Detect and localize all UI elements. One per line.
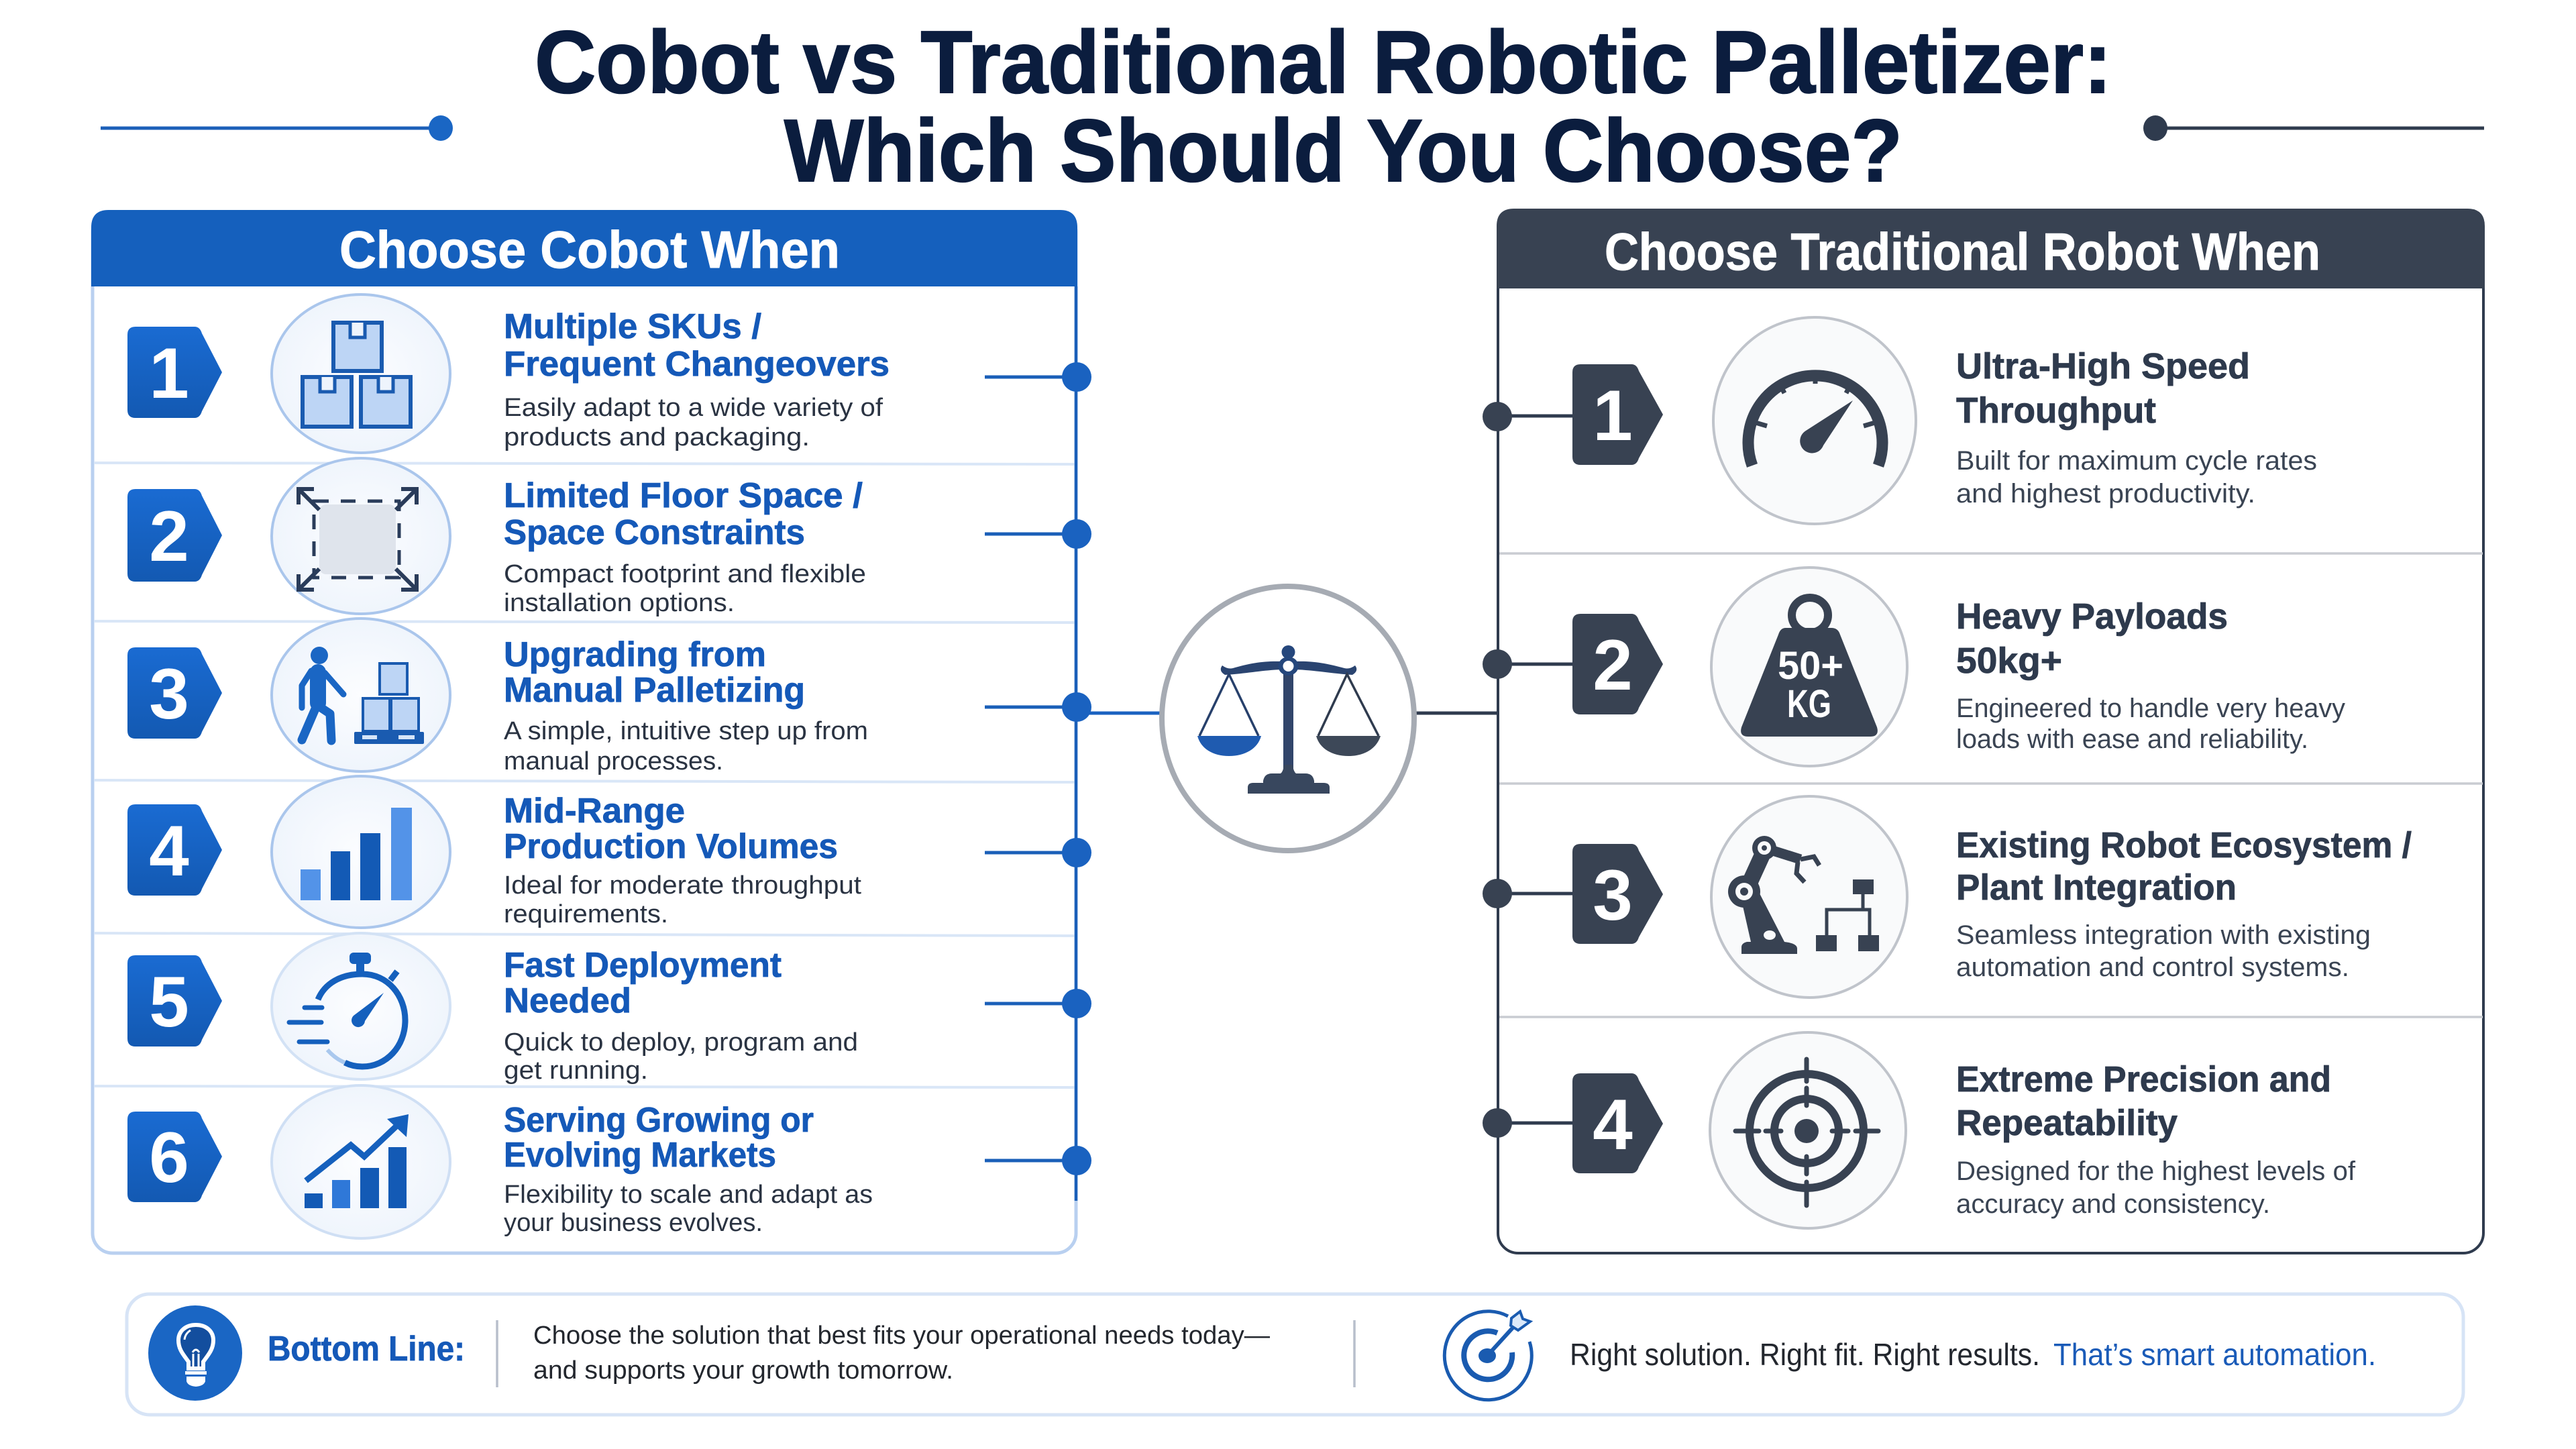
heading and text 2: installation options.: [504, 589, 735, 617]
closing statement: [1570, 1337, 2376, 1372]
heading and text 2: [504, 476, 866, 617]
heading and text 4: [504, 792, 861, 928]
title: Cobot vs Traditional Robotic Palletizer:: [535, 13, 2112, 111]
heading and text 1: Easily adapt to a wide variety of: [504, 394, 883, 422]
icon: robot arm and network: [1711, 796, 1907, 998]
heading and text 1: Throughput: [1956, 390, 2156, 431]
badge 3: 3: [149, 653, 189, 734]
icon: stacked boxes: [272, 294, 450, 453]
row 2: limited floor space: [127, 458, 866, 617]
panel: bottom line: [127, 1294, 2463, 1415]
icon: weight: 50+: [1778, 644, 1843, 688]
heading and text 2: Limited Floor Space /: [504, 476, 863, 515]
connector lines to scale: [1076, 711, 1497, 715]
badge 1: 1: [149, 333, 189, 413]
heading and text 4: accuracy and consistency.: [1956, 1189, 2270, 1219]
heading and text 4: Repeatability: [1956, 1103, 2178, 1143]
badge 6: 6: [149, 1117, 189, 1197]
icon: bar chart: [272, 776, 450, 928]
icon: balance scale: [1162, 586, 1414, 851]
badge 1: [127, 327, 222, 418]
heading and text 6: Evolving Markets: [504, 1136, 776, 1175]
badge 4: 4: [149, 810, 189, 891]
badge 5: 5: [149, 961, 189, 1042]
icon: floor space: [272, 458, 450, 614]
badge 2: [127, 489, 222, 582]
cobot header: Choose Cobot When: [339, 220, 840, 279]
heading and text 5: Needed: [504, 981, 631, 1020]
heading and text 4: Mid-Range: [504, 792, 685, 830]
icon: target with arrow: [1444, 1311, 1532, 1400]
heading and text 4: Extreme Precision and: [1956, 1059, 2331, 1099]
heading and text 2: Compact footprint and flexible: [504, 560, 866, 588]
bottom line label: Bottom Line:: [268, 1330, 465, 1368]
heading and text 3: Manual Palletizing: [504, 671, 805, 710]
badge 2: [1572, 614, 1663, 714]
heading and text 3: Existing Robot Ecosystem /: [1956, 825, 2412, 865]
heading and text 3: A simple, intuitive step up from: [504, 717, 868, 745]
badge 4: 4: [1593, 1084, 1633, 1165]
traditional header: [1497, 209, 2485, 288]
closing statement: That’s smart automation.: [2053, 1337, 2376, 1372]
title accent left: [101, 115, 453, 141]
heading and text 2: Engineered to handle very heavy: [1956, 694, 2345, 723]
row 1: high speed: [1572, 317, 2317, 524]
row 2: heavy payloads: [1572, 568, 2345, 766]
heading and text 5: Fast Deployment: [504, 946, 782, 985]
heading and text 4: Ideal for moderate throughput: [504, 871, 861, 900]
badge 4: [1572, 1073, 1663, 1173]
title: Which Should You Choose?: [784, 101, 1902, 200]
badge 1: 1: [1593, 375, 1633, 455]
heading and text 1: products and packaging.: [504, 423, 810, 451]
heading and text 3: Plant Integration: [1956, 867, 2237, 908]
badge 3: 3: [1593, 855, 1633, 935]
badge 3: [127, 647, 222, 739]
badge 5: [127, 955, 222, 1046]
title: [535, 13, 2112, 200]
heading and text 4: Designed for the highest levels of: [1956, 1157, 2356, 1186]
icon: speedometer: [1713, 317, 1916, 524]
heading and text 6: Serving Growing or: [504, 1101, 814, 1140]
bottom line text: and supports your growth tomorrow.: [533, 1356, 953, 1385]
icon: lightbulb: [148, 1305, 242, 1401]
heading and text 2: 50kg+: [1956, 641, 2062, 681]
row 6: growing markets: [127, 1085, 873, 1238]
badge 2: 2: [1593, 625, 1633, 705]
heading and text 1: Multiple SKUs /: [504, 307, 761, 346]
heading and text 3: [1956, 825, 2412, 982]
heading and text 3: [504, 635, 868, 775]
heading and text 2: [1956, 596, 2345, 754]
heading and text 5: get running.: [504, 1057, 648, 1085]
closing statement: Right solution. Right fit. Right results.: [1570, 1337, 2040, 1372]
bottom line text: [533, 1322, 1270, 1385]
heading and text 4: requirements.: [504, 900, 668, 928]
heading and text 1: Frequent Changeovers: [504, 345, 890, 384]
icon: crosshair target: [1710, 1032, 1906, 1228]
heading and text 4: Production Volumes: [504, 827, 838, 866]
cobot header: [91, 210, 1077, 286]
heading and text 4: [1956, 1059, 2356, 1219]
icon: stopwatch: [272, 933, 450, 1079]
icon: growth chart: [272, 1085, 450, 1238]
heading and text 1: Built for maximum cycle rates: [1956, 446, 2317, 476]
heading and text 3: Seamless integration with existing: [1956, 920, 2371, 950]
row 3: upgrading from manual: [127, 619, 868, 775]
badge 6: [127, 1112, 222, 1202]
heading and text 3: manual processes.: [504, 747, 723, 775]
heading and text 1: [1956, 346, 2317, 508]
heading and text 5: [504, 946, 858, 1085]
heading and text 2: Space Constraints: [504, 513, 805, 552]
icon: weight: KG: [1787, 682, 1831, 726]
badge 1: [1572, 364, 1663, 465]
heading and text 6: [504, 1101, 873, 1237]
heading and text 6: your business evolves.: [504, 1209, 763, 1237]
heading and text 5: Quick to deploy, program and: [504, 1028, 858, 1057]
icon: worker and pallet: [272, 619, 450, 771]
badge 4: [127, 804, 222, 896]
icon: weight: [1711, 568, 1907, 766]
heading and text 1: and highest productivity.: [1956, 479, 2255, 508]
badge 3: [1572, 844, 1663, 944]
heading and text 3: automation and control systems.: [1956, 953, 2349, 982]
row 5: fast deployment: [127, 933, 858, 1085]
bottom line text: Choose the solution that best fits your operational needs today—: [533, 1322, 1270, 1350]
panel: choose cobot: [91, 210, 1091, 1253]
row 1: multiple SKUs: [127, 294, 890, 453]
heading and text 6: Flexibility to scale and adapt as: [504, 1181, 873, 1209]
traditional header: Choose Traditional Robot When: [1605, 222, 2320, 281]
title accent right: [2143, 115, 2484, 141]
heading and text 3: Upgrading from: [504, 635, 766, 674]
heading and text 1: Ultra-High Speed: [1956, 346, 2250, 386]
panel: choose traditional robot: [1483, 209, 2485, 1253]
connectors: traditional: [1483, 402, 1574, 1138]
row 3: robot ecosystem: [1572, 796, 2412, 998]
heading and text 1: [504, 307, 890, 451]
heading and text 2: loads with ease and reliability.: [1956, 724, 2308, 754]
heading and text 2: Heavy Payloads: [1956, 596, 2228, 637]
row 4: extreme precision: [1572, 1032, 2356, 1228]
connectors: cobot: [985, 362, 1091, 1175]
badge 2: 2: [149, 496, 189, 576]
row 4: mid-range volumes: [127, 776, 861, 928]
